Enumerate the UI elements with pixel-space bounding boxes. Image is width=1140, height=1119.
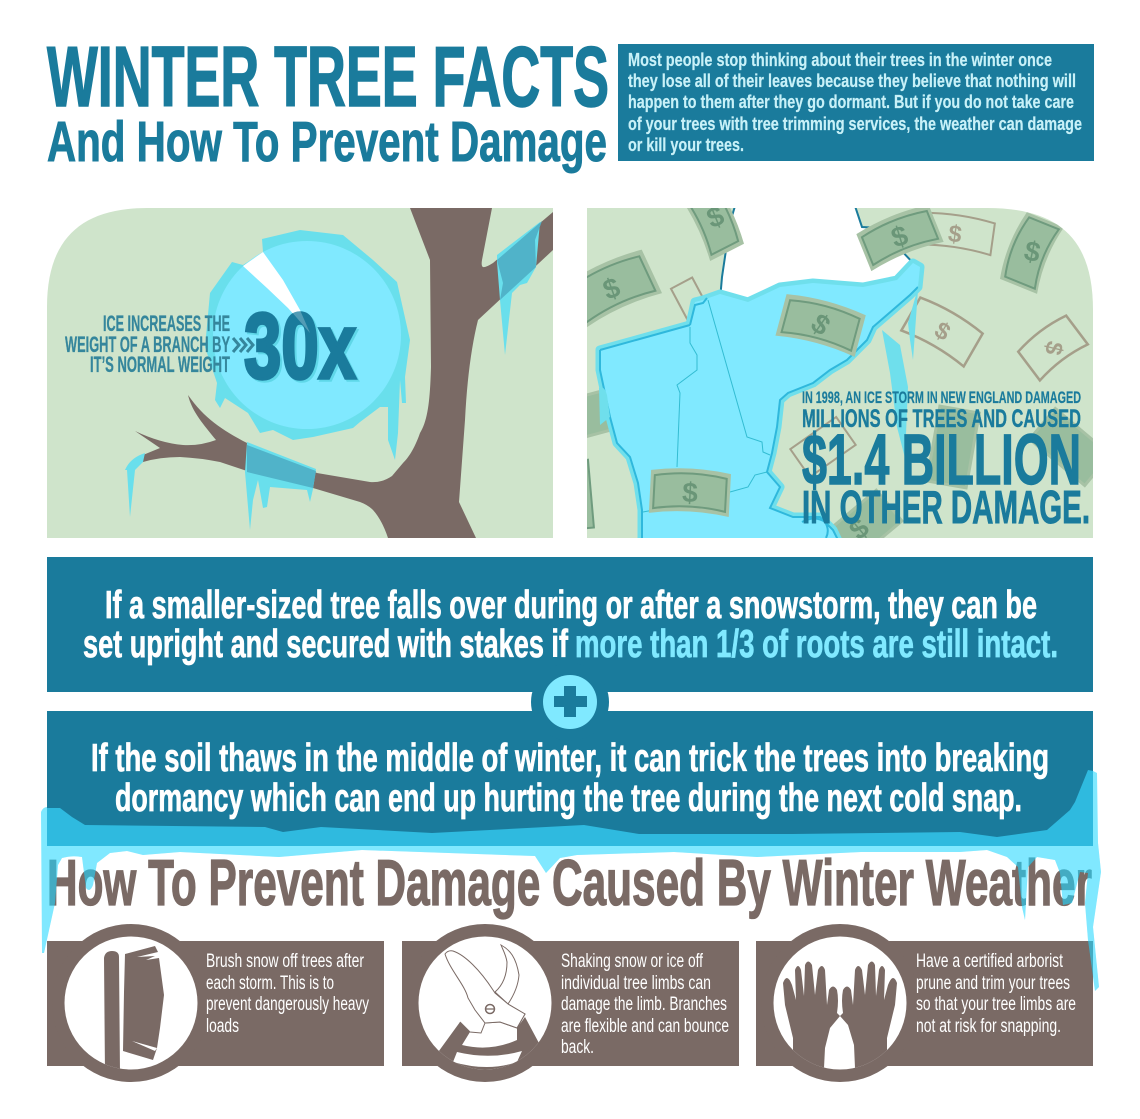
fact bar: fallen small tree xyxy=(47,557,1093,692)
brush text: loads xyxy=(206,1016,239,1037)
fact bar: soil thaw xyxy=(47,711,1093,846)
icon: brush xyxy=(64,924,198,1082)
arborist text xyxy=(916,951,1076,1037)
title xyxy=(47,30,609,174)
brush text: prevent dangerously heavy xyxy=(206,994,369,1015)
weight text xyxy=(64,315,230,372)
panel: ice storm map xyxy=(587,208,1093,538)
icicles on circle xyxy=(205,230,410,460)
background bills: $ xyxy=(1039,339,1068,358)
ice circle xyxy=(213,241,401,429)
title: WINTER TREE FACTS xyxy=(47,30,609,125)
background bills: $ xyxy=(930,317,955,347)
shaking text: are flexible and can bounce xyxy=(561,1016,729,1037)
light ice dripping from bar xyxy=(41,771,1101,991)
chevrons xyxy=(233,338,253,352)
shaking text: damage the limb. Branches xyxy=(561,994,727,1015)
tree xyxy=(125,208,553,538)
white northern area xyxy=(720,206,915,300)
panel: certified arborist xyxy=(756,924,1093,1085)
foreground bills xyxy=(648,208,944,517)
ice tint over heading xyxy=(42,843,1101,991)
30x number: 30x xyxy=(246,296,358,400)
fact bar: fallen small tree: set upright and secured with stakes if xyxy=(83,623,569,666)
intro text box xyxy=(618,44,1094,161)
foreground bills: $ xyxy=(702,199,729,234)
background bills: $ xyxy=(946,220,964,249)
shaking text: back. xyxy=(561,1037,594,1058)
shaking text xyxy=(561,951,729,1058)
icon: plus xyxy=(531,663,609,741)
title: And How To Prevent Damage xyxy=(47,110,607,174)
weight text: WEIGHT OF A BRANCH BY xyxy=(65,332,230,357)
lower branch ice xyxy=(245,442,316,530)
arborist text: Have a certified arborist xyxy=(916,951,1064,972)
arborist text: so that your tree limbs are xyxy=(916,994,1076,1015)
branch tip ice xyxy=(125,453,145,517)
icon: gloves xyxy=(774,924,906,1082)
weight text: ICE INCREASES THE xyxy=(103,311,230,336)
background bills xyxy=(587,212,1093,538)
panel: ice weight on branch xyxy=(47,208,553,538)
panel: brush snow xyxy=(47,924,384,1082)
shaking text: individual tree limbs can xyxy=(561,973,711,994)
map of new england under ice xyxy=(599,263,923,545)
30x number: 30x xyxy=(244,294,356,398)
panel: shaking limbs xyxy=(402,924,739,1082)
foreground bills: $ xyxy=(805,307,836,342)
arborist text: prune and trim your trees xyxy=(916,973,1070,994)
background bills: $ xyxy=(599,271,625,306)
brush text: Brush snow off trees after xyxy=(206,951,364,972)
intro text box: or kill your trees. xyxy=(628,134,744,155)
white wedge xyxy=(243,252,300,314)
brush text xyxy=(206,951,369,1037)
storm damage text xyxy=(802,388,1090,533)
foreground bills: $ xyxy=(888,219,912,254)
icon: pruners xyxy=(418,924,552,1082)
30x number xyxy=(244,311,360,383)
shaking text: Shaking snow or ice off xyxy=(561,951,704,972)
foreground bills: $ xyxy=(681,477,699,508)
weight text: IT’S NORMAL WEIGHT xyxy=(90,352,230,377)
dark ice on bar xyxy=(47,770,1093,846)
background bills: $ xyxy=(1021,235,1044,268)
background bills: $ xyxy=(843,512,875,546)
arborist text: not at risk for snapping. xyxy=(916,1016,1061,1037)
brush text: each storm. This is to xyxy=(206,973,334,994)
upper branch ice xyxy=(497,221,542,355)
